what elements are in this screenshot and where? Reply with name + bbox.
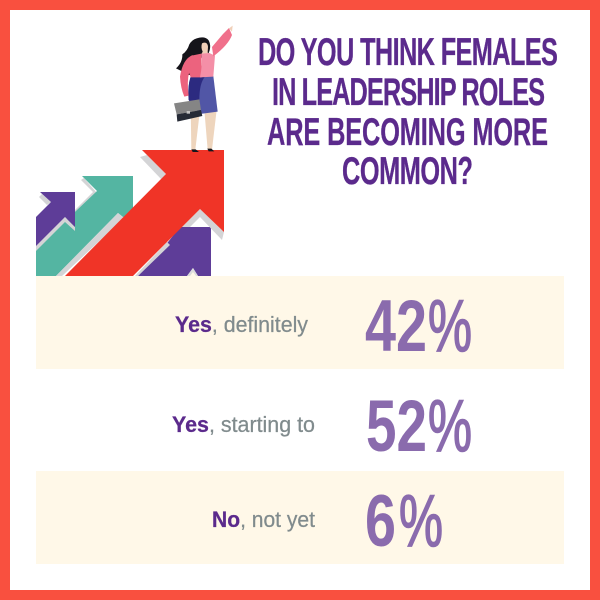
row 2 label: Yes, starting to	[172, 412, 315, 437]
title: ARE BECOMING MORE	[267, 109, 548, 153]
raised arm	[212, 28, 232, 56]
arrow: large red	[65, 150, 224, 276]
title: IN LEADERSHIP ROLES	[272, 69, 545, 113]
title	[258, 29, 558, 192]
arrow: small purple	[36, 192, 75, 251]
row 3 value: 6	[365, 481, 396, 562]
band: row 3 background	[36, 471, 564, 564]
row 1 label: Yes, definitely	[175, 312, 308, 337]
row 1 value: %	[428, 286, 472, 367]
lowered arm	[180, 55, 193, 97]
illustration: rising arrows	[36, 150, 224, 276]
title: COMMON?	[342, 148, 473, 192]
row 1 value: 42	[365, 286, 427, 367]
row 3 value	[365, 481, 443, 562]
briefcase	[174, 99, 202, 122]
head	[201, 43, 209, 57]
arrow: teal	[36, 176, 133, 276]
hair	[176, 37, 210, 75]
band: row 1 background	[36, 276, 564, 369]
illustration: businesswoman	[174, 26, 233, 152]
shoes	[191, 149, 199, 152]
blouse	[188, 54, 202, 77]
row 2 value: 52	[366, 386, 427, 467]
title: DO YOU THINK FEMALES	[258, 29, 558, 73]
row 3 label: No, not yet	[212, 507, 315, 532]
skirt	[188, 76, 218, 114]
row 2 value: %	[428, 386, 472, 467]
arrow: large purple	[135, 227, 211, 276]
legs	[191, 105, 200, 150]
row 3 value: %	[399, 481, 443, 562]
